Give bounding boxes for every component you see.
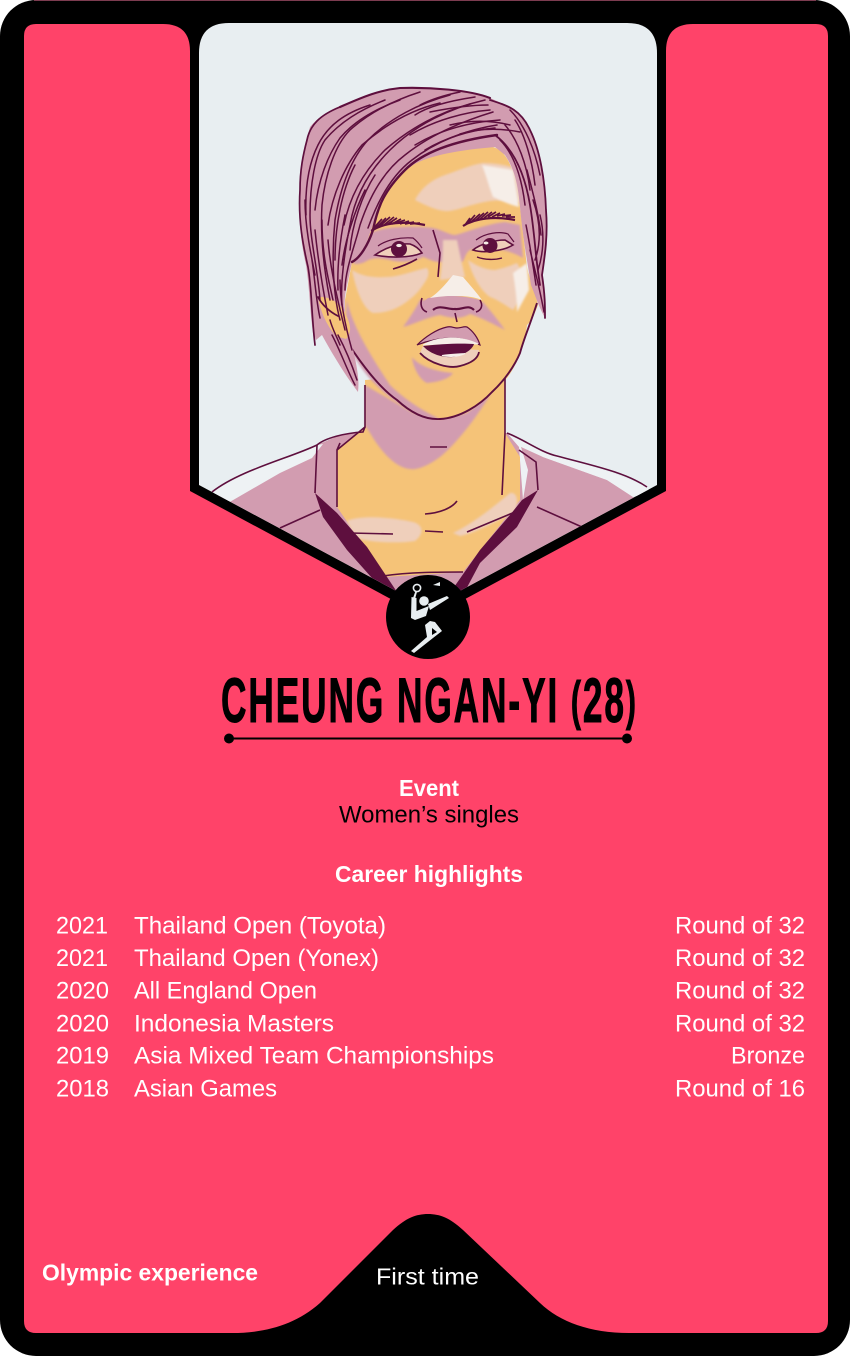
event heading: Event (399, 775, 459, 801)
face (345, 147, 538, 419)
career highlights table: Round of 32 (675, 1010, 805, 1038)
career highlights table: 2020 (56, 1010, 109, 1038)
career highlights table: Bronze (731, 1042, 805, 1070)
forehead shine (482, 165, 519, 207)
jaw shadow (346, 300, 440, 419)
portrait background (199, 23, 657, 613)
portrait illustration (199, 23, 657, 625)
badge circle (386, 575, 470, 659)
career highlights table: 2020 (56, 978, 109, 1004)
career highlights table: Asia Mixed Team Championships (134, 1042, 494, 1070)
nose, jaw and body lines (212, 230, 647, 576)
shirt (218, 433, 634, 590)
olympic experience value: First time (376, 1264, 479, 1290)
title: ( (571, 671, 581, 731)
career highlights heading: Career highlights (335, 861, 523, 887)
event value: Women’s singles (339, 802, 519, 828)
icon: leg cut-out (432, 628, 437, 635)
icon: badminton player (411, 582, 449, 653)
career highlights table: Round of 16 (675, 1076, 805, 1102)
career highlights table: 2021 (56, 912, 108, 940)
forehead highlight (415, 163, 520, 211)
title underline (224, 734, 632, 744)
smile line shadows (403, 300, 505, 330)
eye shadow band (353, 222, 523, 264)
eyes (375, 233, 514, 269)
career highlights table: Asian Games (134, 1076, 277, 1102)
career highlights table: Round of 32 (675, 912, 805, 940)
collarbone highlights (347, 493, 517, 542)
nose bridge (440, 240, 465, 280)
badge: badminton pictogram (386, 575, 470, 659)
career highlights table (56, 912, 805, 1102)
career highlights table: Round of 32 (675, 978, 805, 1004)
title: 28 (583, 665, 624, 736)
mouth (417, 327, 480, 367)
cheek highlights (352, 260, 525, 313)
ear (318, 297, 350, 339)
nose tip (430, 275, 482, 300)
career highlights table: 2019 (56, 1042, 109, 1070)
title: ) (626, 671, 636, 731)
hair (299, 88, 547, 392)
career highlights table: Indonesia Masters (134, 1010, 334, 1038)
right cheek shine (513, 263, 529, 312)
shoulder highlights (212, 433, 650, 503)
neck and chest (337, 370, 520, 577)
career highlights table: 2018 (56, 1076, 109, 1102)
chin shadow (412, 357, 453, 383)
title: CHEUNG NGAN-YI (221, 665, 557, 736)
career highlights table: 2021 (56, 945, 108, 972)
olympic experience label: Olympic experience (42, 1260, 258, 1286)
hair strands (300, 88, 547, 385)
neck shadow (365, 385, 492, 469)
career highlights table: All England Open (134, 978, 317, 1004)
lanyard (315, 490, 538, 596)
nose (424, 296, 480, 303)
career highlights table: Round of 32 (675, 945, 805, 972)
eyebrows (371, 212, 515, 231)
top edge tint (34, 0, 816, 1)
career highlights table: Thailand Open (Toyota) (134, 912, 386, 940)
career highlights table: Thailand Open (Yonex) (134, 945, 379, 972)
